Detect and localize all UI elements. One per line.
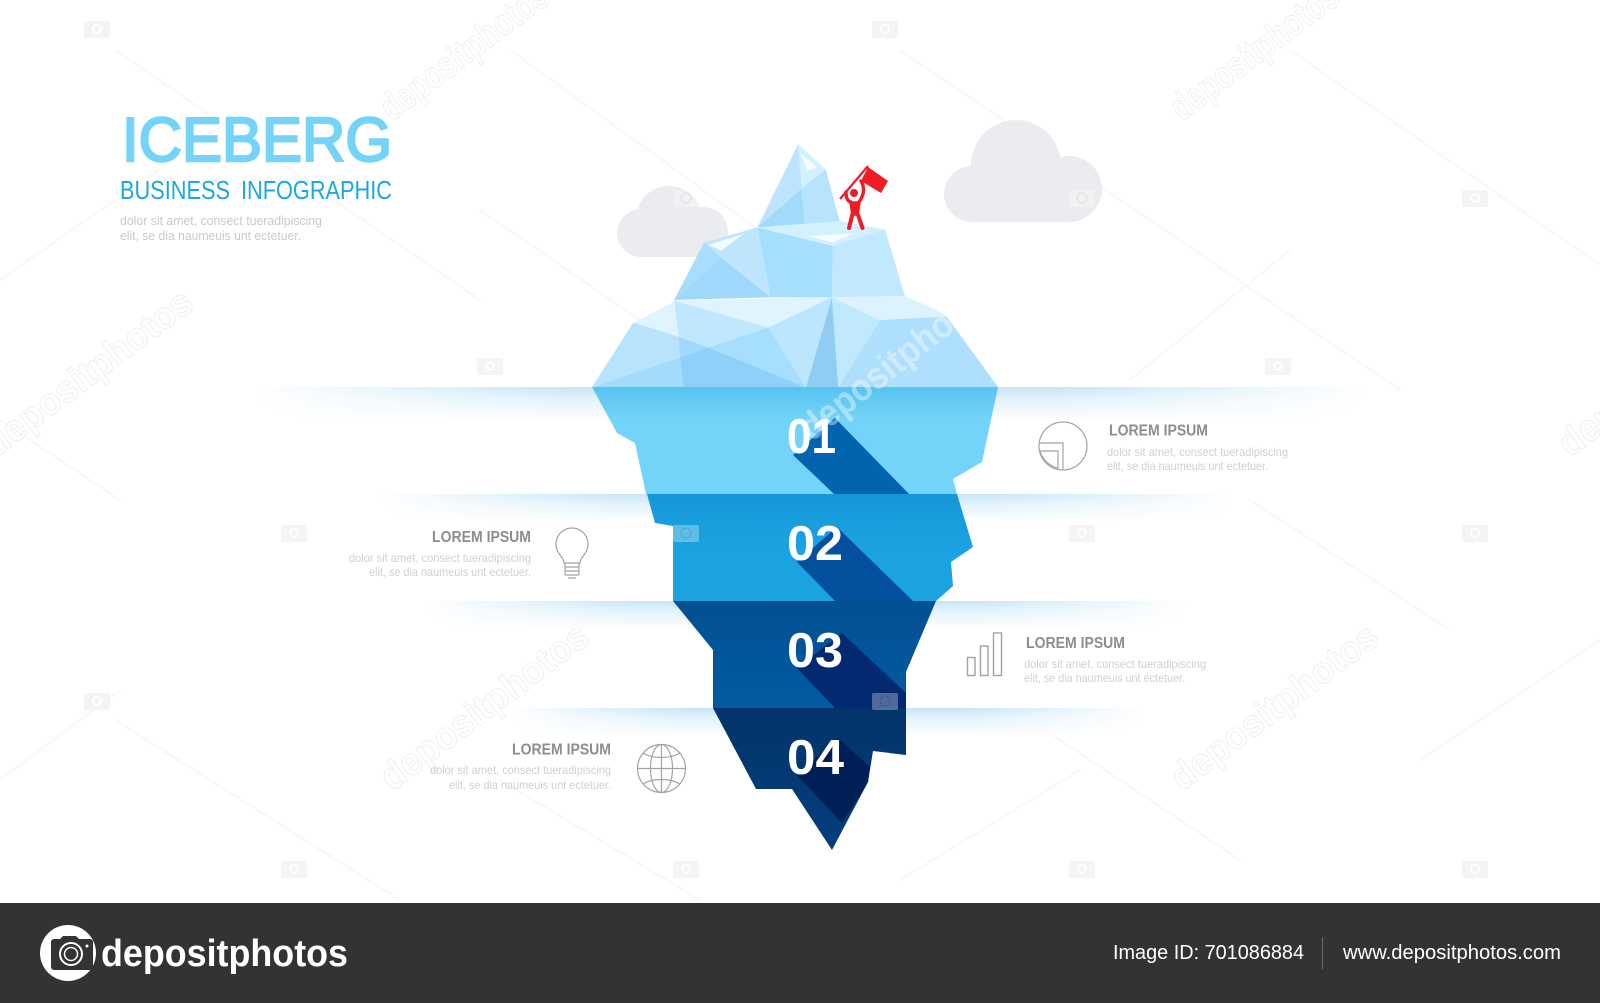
- iceberg level 2: [647, 494, 973, 601]
- subtitle: INFOGRAPHIC: [241, 175, 392, 205]
- peak facets: [757, 144, 840, 227]
- figure with red flag: [840, 166, 888, 228]
- iceberg above water: [592, 144, 998, 387]
- icon: pie chart: [1039, 422, 1087, 470]
- flag: [861, 167, 888, 193]
- level numbers: 04: [787, 731, 844, 785]
- number shadow 03: [797, 633, 906, 708]
- watermark: depositphotos text marks: depositphotos: [1162, 615, 1387, 799]
- heading: LOREM IPSUM: [432, 529, 531, 546]
- watermark: camera marks: [84, 21, 1488, 878]
- iceberg level 1: [592, 387, 998, 494]
- body text: elit, se dia naumeuis unt ectetuer.: [1107, 459, 1268, 473]
- icon: bars: [968, 633, 1002, 676]
- camera marks over iceberg: [673, 525, 898, 710]
- intro text: elit, se dia naumeuis unt ectetuer.: [120, 229, 301, 243]
- level numbers: [787, 410, 844, 785]
- camera marks over clouds: [673, 190, 1095, 207]
- body text: dolor sit amet, consect tueradipiscing: [1024, 657, 1206, 671]
- body text: [349, 551, 531, 579]
- number shadow 04: [797, 738, 870, 823]
- level numbers: 01: [787, 410, 836, 464]
- intro text: dolor sit amet, consect tueradipiscing: [120, 214, 322, 228]
- body text: [430, 763, 611, 792]
- body text: [1024, 657, 1206, 685]
- cloud left: [617, 186, 728, 257]
- person: [846, 181, 864, 228]
- item 1: pie chart: [1039, 422, 1288, 473]
- item 4: globe: [430, 742, 686, 792]
- number shadow 02: [797, 527, 913, 601]
- subtitle: [120, 175, 392, 205]
- body text: dolor sit amet, consect tueradipiscing: [1107, 445, 1288, 459]
- item 2: light bulb: [349, 528, 588, 579]
- watermark: depositphotos text marks: [0, 0, 1600, 799]
- iceberg level 3: [673, 601, 936, 708]
- divider: [1322, 937, 1323, 969]
- item 3: bar chart: [968, 633, 1206, 685]
- flag pole: [840, 166, 868, 199]
- body text: elit, se dia naumeuis unt ectetuer.: [449, 778, 611, 792]
- plateau facets: [674, 221, 905, 300]
- body text: dolor sit amet, consect tueradipiscing: [349, 551, 531, 565]
- body text: dolor sit amet, consect tueradipiscing: [430, 763, 611, 777]
- logo: wordmark: depositphotos: [101, 933, 348, 975]
- title block: [120, 106, 392, 243]
- footer bar: [0, 903, 1600, 1003]
- watermark across iceberg: depositphotos: [792, 271, 1003, 449]
- icon: bulb: [556, 528, 588, 578]
- heading: LOREM IPSUM: [1026, 635, 1125, 652]
- heading: LOREM IPSUM: [512, 742, 611, 758]
- lower facets: [592, 296, 998, 387]
- number shadow 01: [793, 418, 909, 494]
- watermark: depositphotos text marks: depositphotos: [372, 615, 597, 799]
- cloud right: [944, 120, 1102, 222]
- title: ICEBERG: ICEBERG: [122, 106, 392, 175]
- level numbers: 02: [787, 517, 843, 571]
- body text: [1107, 445, 1288, 473]
- body text: elit, se dia naumeuis unt ectetuer.: [1024, 671, 1185, 685]
- body text: elit, se dia naumeuis unt ectetuer.: [369, 565, 531, 579]
- subtitle: BUSINESS: [120, 175, 230, 205]
- iceberg level 4: [713, 708, 906, 850]
- intro text: [120, 214, 322, 243]
- website: www.depositphotos.com: [1342, 942, 1561, 964]
- image id: Image ID: 701086884: [1113, 942, 1304, 964]
- icon: globe: [638, 744, 686, 792]
- logo: camera badge: [40, 925, 96, 981]
- water level bands: [250, 387, 1370, 736]
- level numbers: 03: [787, 624, 843, 678]
- heading: LOREM IPSUM: [1109, 422, 1208, 440]
